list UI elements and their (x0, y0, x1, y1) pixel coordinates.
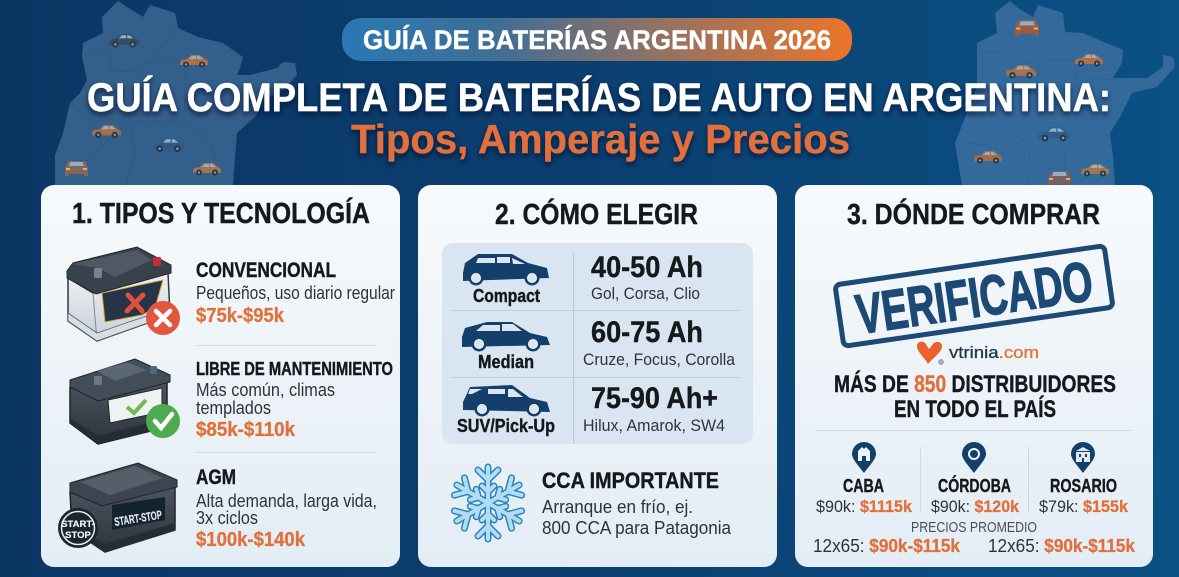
icon: snowflake (452, 467, 524, 539)
row: 60-75 Ah: 60-75 Ah (591, 316, 703, 349)
text: agm: $100k-$140k (196, 529, 306, 551)
text: agm (196, 466, 377, 551)
text: convencional: $75k-$95k (196, 305, 285, 327)
title: Tipos, Amperaje y Precios (351, 116, 850, 162)
icon: green check badge (146, 404, 180, 438)
text: convencional (196, 259, 395, 327)
icon: start-stop badge: START- (61, 519, 95, 530)
callout: cca importante: Arranque en frío, ej. (542, 497, 693, 517)
city: córdoba (931, 442, 1020, 516)
city: córdoba: $90k: $120k (931, 497, 1020, 516)
icon: red x badge (146, 301, 180, 335)
map cars right (974, 20, 1109, 186)
map: right Argentina silhouette (955, 1, 1175, 186)
text: precios promedio: 12x65: $90k-$115k (988, 536, 1136, 556)
icon: pin córdoba (962, 442, 986, 473)
icon: start-stop badge: STOP (65, 530, 92, 541)
city: caba (816, 442, 913, 516)
text: convencional: CONVENCIONAL (196, 259, 336, 282)
text: precios promedio: PRECIOS PROMEDIO (911, 519, 1037, 536)
icon: pin rosario (1071, 442, 1095, 473)
icon: suv car (463, 385, 550, 416)
panel: cómo elegir (418, 185, 1153, 567)
callout: cca importante: 800 CCA para Patagonia (542, 518, 732, 538)
text: precios promedio: 12x65: $90k-$115k (813, 536, 961, 556)
text: libre de mantenimiento: templados (196, 398, 271, 418)
row: 75-90 Ah+: 75-90 Ah+ (591, 382, 718, 415)
text: distribuidores: MÁS DE 850 DISTRIBUIDORES (834, 370, 1116, 398)
map: left Argentina silhouette (55, 1, 297, 186)
icon: agm battery: START-STOP (113, 508, 163, 529)
callout: cca importante: CCA IMPORTANTE (542, 468, 719, 493)
text: convencional: Pequeños, uso diario regular (196, 283, 395, 303)
icon: pin caba (852, 442, 876, 473)
stamp: verificado (835, 246, 1113, 348)
icon: conventional battery (67, 247, 171, 341)
label: suv/pick-up: SUV/Pick-Up (457, 416, 555, 436)
map cars left (65, 34, 221, 176)
icon: maintenance-free battery (70, 359, 170, 444)
city: córdoba: CÓRDOBA (938, 475, 1011, 496)
icon: agm battery (70, 463, 177, 552)
text: libre de mantenimiento: Más común, climas (196, 380, 335, 400)
icon: sedan car (462, 322, 550, 352)
logo: vtrinia.com: vtrinia .com (949, 343, 1039, 362)
label: median: Median (478, 352, 534, 372)
city: caba: $90k: $1115k (816, 497, 913, 516)
table: amperage by vehicle (442, 243, 753, 444)
row: 60-75 Ah (583, 316, 736, 369)
heading: cómo elegir: 2. CÓMO ELEGIR (495, 197, 698, 231)
text: libre de mantenimiento: $85k-$110k (196, 419, 296, 441)
text: libre de mantenimiento: LIBRE DE MANTENIMIENTO (196, 358, 393, 379)
icon: start-stop badge (58, 508, 98, 548)
heading: dónde comprar: 3. DÓNDE COMPRAR (847, 197, 1100, 231)
text: precios promedio (813, 519, 1136, 556)
title: GUÍA COMPLETA DE BATERÍAS DE AUTO EN ARGENTINA: (87, 75, 1111, 120)
row: 75-90 Ah+: Hilux, Amarok, SW4 (583, 416, 725, 435)
pill badge: GUÍA DE BATERÍAS ARGENTINA 2026 (363, 24, 831, 55)
callout: cca importante (542, 468, 732, 538)
text: agm: Alta demanda, larga vida, (196, 491, 377, 511)
logo: vtrinia.com (917, 342, 1039, 365)
panel: dónde comprar (795, 185, 1153, 567)
label: compact: Compact (473, 286, 540, 306)
city: caba: CABA (843, 476, 884, 496)
row: 40-50 Ah: Gol, Corsa, Clio (591, 284, 700, 303)
row: 40-50 Ah (591, 251, 703, 303)
panel: tipos y tecnología (41, 185, 400, 567)
text: agm: 3x ciclos (196, 508, 258, 528)
city: rosario (1039, 442, 1129, 516)
row: 60-75 Ah: Cruze, Focus, Corolla (583, 350, 736, 369)
text: agm: AGM (196, 466, 236, 489)
text: libre de mantenimiento (196, 358, 393, 441)
text: distribuidores: EN TODO EL PAÍS (894, 395, 1056, 423)
text: distribuidores (834, 370, 1116, 423)
city: rosario: ROSARIO (1050, 476, 1117, 496)
heading: tipos: 1. TIPOS Y TECNOLOGÍA (72, 196, 370, 230)
pill badge (342, 18, 852, 61)
icon: compact car (463, 254, 549, 286)
title (87, 75, 1111, 162)
city: rosario: $79k: $155k (1039, 497, 1129, 516)
row: 75-90 Ah+ (583, 382, 725, 435)
row: 40-50 Ah: 40-50 Ah (591, 251, 703, 284)
